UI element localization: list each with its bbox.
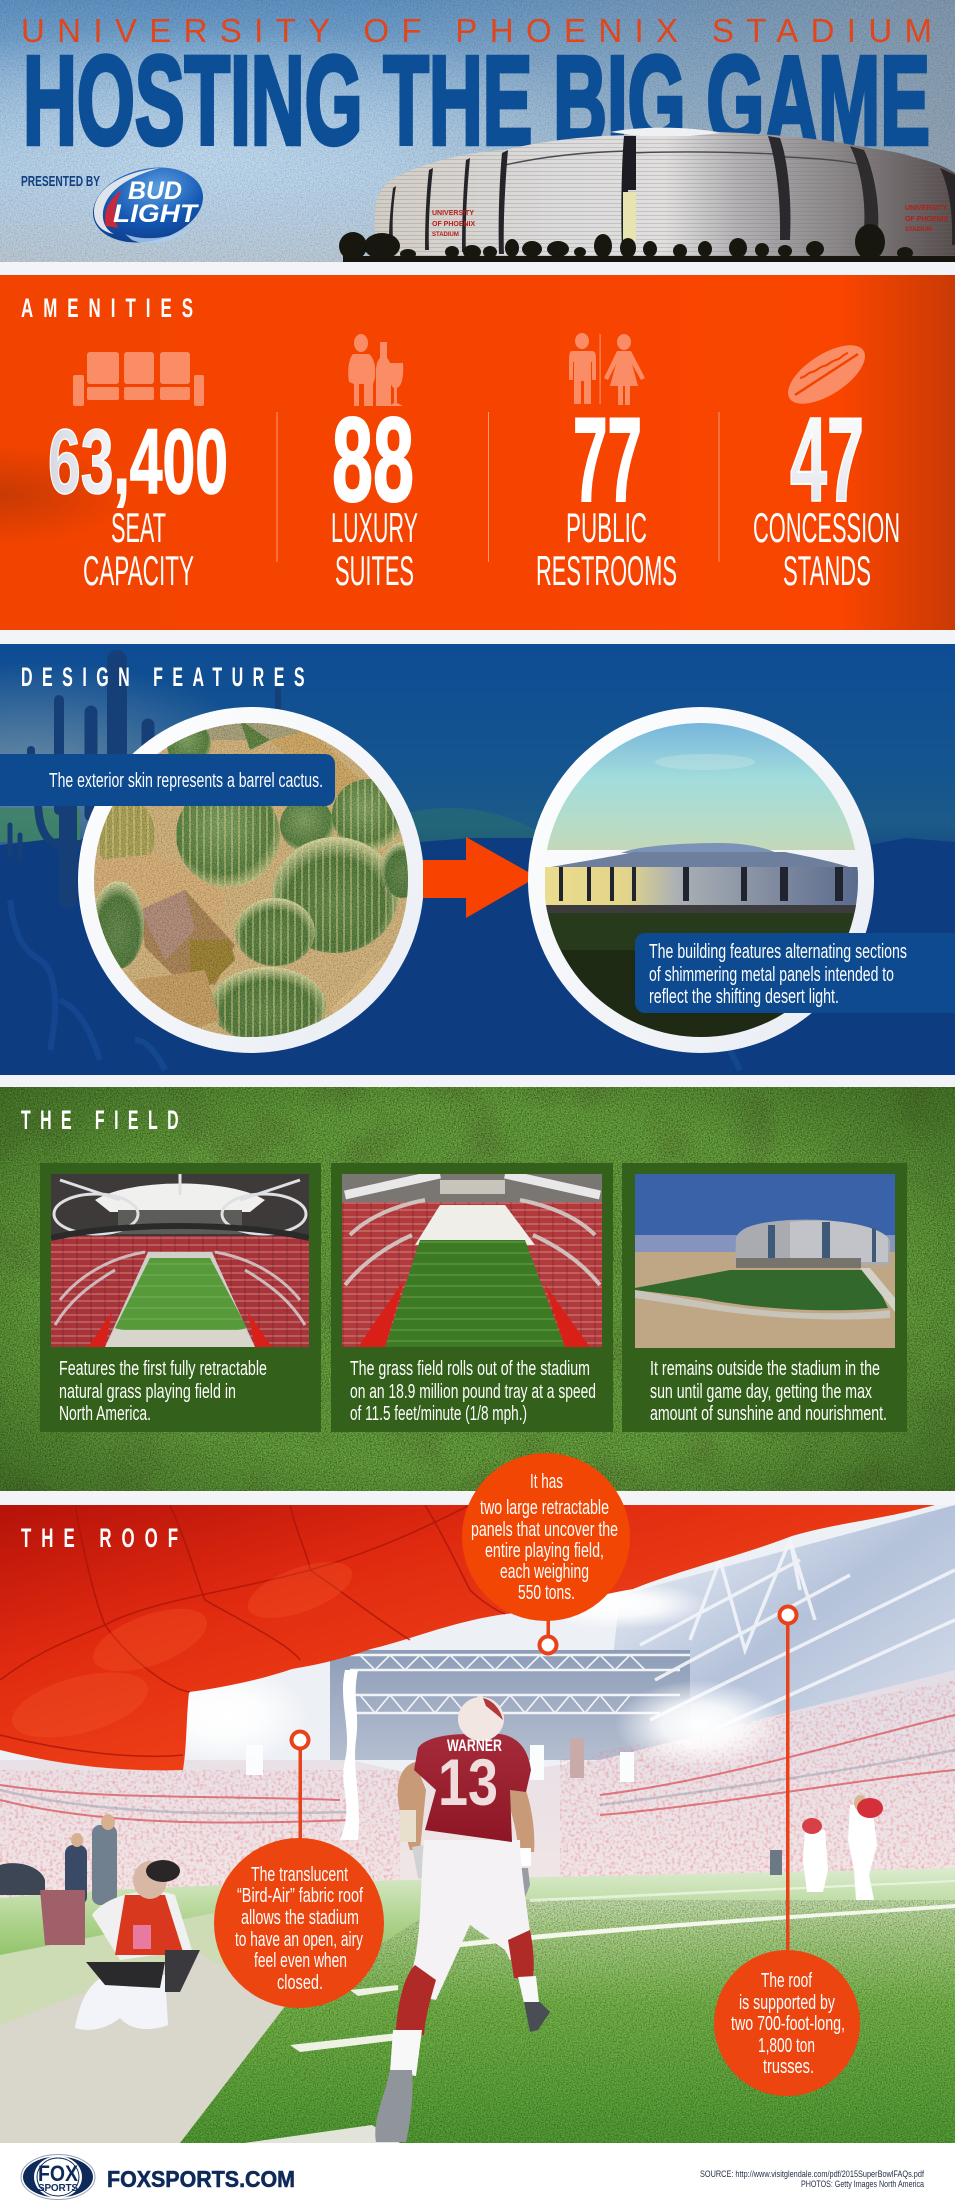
source credits: PHOTOS: Getty Images North America: [801, 2179, 924, 2189]
panel: amenities: [0, 275, 955, 630]
callout: retractable panels: each weighing: [500, 1561, 589, 1583]
footer: [0, 2143, 955, 2211]
photo: stadium interior, long view: [51, 1174, 309, 1347]
card: rolling tray: [331, 1163, 613, 1432]
stat: public restrooms: [536, 393, 677, 594]
callout: retractable panels: It has: [530, 1471, 563, 1493]
photo: field outside stadium: [635, 1174, 895, 1348]
presented by label: PRESENTED BY: [21, 173, 100, 190]
photo: stadium exterior: OF PHOENIX: [905, 216, 949, 223]
stat: concession stands: 47: [790, 393, 864, 527]
photo: stadium exterior: UNIVERSITY: [905, 205, 947, 212]
grass background: [0, 1087, 955, 1491]
stat: public restrooms: RESTROOMS: [536, 547, 677, 594]
callout: bird-air fabric: allows the stadium: [241, 1907, 359, 1929]
stat: concession stands: [753, 393, 900, 594]
stat: luxury suites: 88: [332, 393, 414, 527]
stat: public restrooms: 77: [573, 393, 642, 527]
heading: the field: THE FIELD: [21, 1105, 188, 1135]
divider: [718, 412, 720, 562]
callout: retractable panels: [462, 1453, 630, 1621]
logo: Bud Light: BUD: [128, 177, 182, 205]
text: card 2: of 11.5 feet/minute (1/8 mph.): [350, 1403, 527, 1425]
grass field: [0, 1868, 955, 2143]
brand: foxsports.com: FOXSPORTS.COM: [107, 2166, 295, 2192]
stat: concession stands: STANDS: [783, 547, 871, 594]
callout: trusses: The roof: [761, 1970, 812, 1992]
callout: metal panels: [635, 933, 955, 1013]
photo: stadium exterior: OF PHOENIX: [432, 221, 476, 228]
callout: trusses: trusses.: [763, 2056, 814, 2078]
text: card 2: on an 18.9 million pound tray at a speed: [350, 1381, 596, 1403]
text: card 1: [59, 1358, 267, 1425]
sky background: [0, 0, 955, 262]
stat: seat capacity: [48, 411, 228, 594]
callout: retractable panels: entire playing field,: [485, 1540, 604, 1562]
photo: stadium exterior: UNIVERSITY: [432, 210, 474, 217]
heading: the roof: THE ROOF: [21, 1523, 188, 1553]
card: outdoor sun: [622, 1163, 907, 1432]
callout: bird-air fabric: The translucent: [251, 1864, 348, 1886]
heading: amenities: AMENITIES: [21, 293, 203, 323]
divider: [488, 412, 489, 562]
icon: couch: [73, 352, 204, 406]
callout: trusses: two 700-foot-long,: [731, 2013, 845, 2035]
orange background: [0, 275, 955, 630]
icon: hot dog: [779, 334, 874, 415]
text: card 2: [350, 1358, 596, 1425]
logo: Bud Light: LIGHT: [113, 200, 200, 228]
callout: bird-air fabric: to have an open, airy: [235, 1929, 363, 1951]
icon: restroom figures: [569, 333, 645, 405]
stat: seat capacity: 63,400: [48, 411, 228, 513]
desert background: [0, 644, 955, 1075]
callout: bird-air fabric: feel even when: [254, 1950, 347, 1972]
logo: Fox Sports: [21, 2154, 95, 2200]
cheerleaders: [770, 1795, 883, 1900]
photo: stadium exterior: STADIUM: [432, 232, 459, 238]
icon: suite guest with wine: [348, 334, 403, 406]
logo: Fox Sports: FOX: [38, 2161, 78, 2186]
image: barrel cactus circle: [78, 707, 424, 1053]
callout: barrel cactus: The exterior skin represents a barrel cactus.: [49, 770, 323, 792]
stat: public restrooms: PUBLIC: [566, 504, 647, 551]
stat: luxury suites: [331, 393, 418, 594]
callout stem and ring: retractable panels: [540, 1615, 556, 1654]
player: number 13: [375, 1697, 550, 2142]
footer background: [0, 2143, 955, 2211]
source credits: [700, 2169, 924, 2189]
callout: retractable panels: 550 tons.: [518, 1582, 575, 1604]
callout: barrel cactus: [0, 754, 335, 806]
panel: header: [0, 0, 955, 262]
trees: [339, 224, 955, 262]
flares: [186, 1586, 778, 1766]
photo: stadium exterior: STADIUM: [905, 227, 932, 233]
photo: stadium interior, field rolled in: [342, 1174, 602, 1347]
stadium photo background: [0, 1505, 955, 1898]
panel: the field: [0, 1087, 955, 1491]
callout: trusses: is supported by: [739, 1992, 835, 2014]
stat: luxury suites: SUITES: [335, 547, 414, 594]
photo: stadium exterior: [339, 128, 955, 262]
text: card 3: [650, 1358, 887, 1425]
panel: design features: [0, 644, 955, 1075]
text: card 1: North America.: [59, 1403, 151, 1425]
logo: Fox Sports: SPORTS: [38, 2183, 78, 2194]
text: card 1: Features the first fully retractable: [59, 1358, 267, 1380]
panel: the roof: [0, 1505, 955, 2143]
callout: bird-air fabric: closed.: [277, 1972, 323, 1994]
divider: [276, 412, 278, 562]
text: card 2: The grass field rolls out of the stadium: [350, 1358, 590, 1380]
callout: bird-air fabric: “Bird-Air” fabric roof: [237, 1885, 363, 1907]
callout: retractable panels: panels that uncover the: [471, 1519, 618, 1541]
subtitle: UNIVERSITY OF PHOENIX STADIUM: [21, 12, 932, 49]
player: number 13: WARNER: [447, 1736, 502, 1755]
stat: seat capacity: SEAT: [111, 504, 166, 551]
heading: design features: DESIGN FEATURES: [21, 662, 314, 692]
callout: bird-air fabric: [214, 1732, 384, 2008]
arrow: [423, 837, 537, 918]
player: number 13: 13: [438, 1745, 498, 1819]
inflatable red tunnel: [0, 1505, 935, 1770]
callout: trusses: 1,800 ton: [758, 2035, 815, 2057]
stat: seat capacity: CAPACITY: [83, 547, 194, 594]
photographer and crew: [0, 1814, 200, 2030]
stat: luxury suites: LUXURY: [331, 504, 418, 551]
text: card 1: natural grass playing field in: [59, 1381, 236, 1403]
callout: trusses: [714, 1606, 860, 2096]
image: stadium circle: [528, 707, 874, 1053]
text: card 3: sun until game day, getting the max: [650, 1381, 872, 1403]
callout: retractable panels: two large retractable: [480, 1497, 609, 1519]
callout: metal panels: reflect the shifting desert light.: [649, 986, 839, 1008]
logo: Bud Light: [93, 168, 203, 244]
card: retractable field: [40, 1163, 321, 1432]
